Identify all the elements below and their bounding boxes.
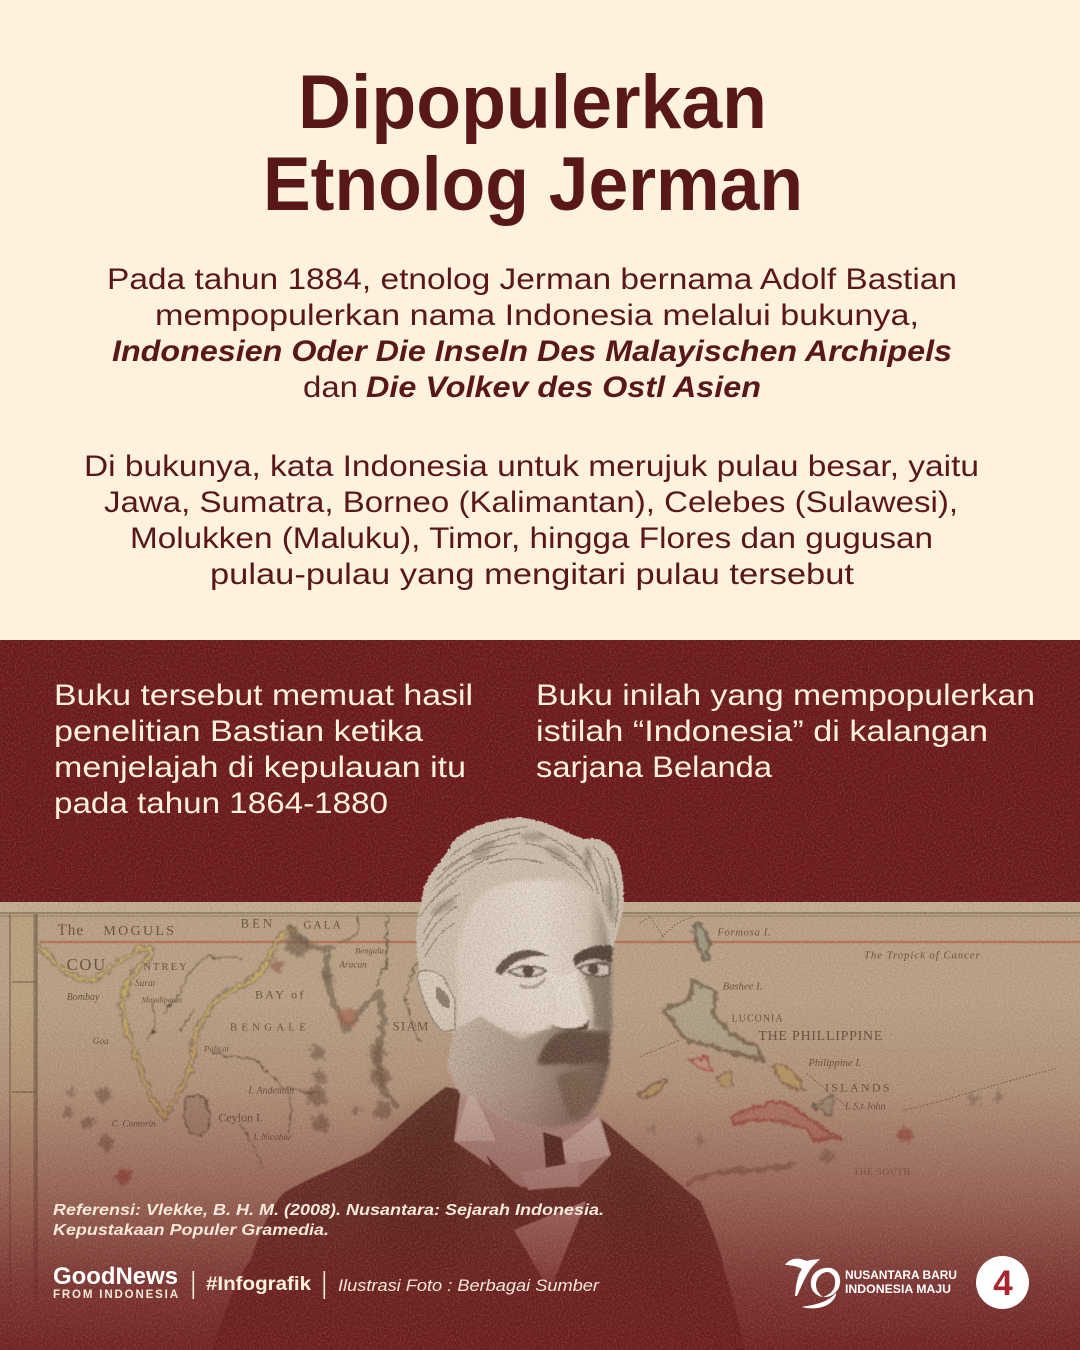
title (263, 60, 803, 227)
map west: India and Bengal: Aracan (338, 960, 367, 970)
beard stipple (447, 1017, 613, 1130)
panel text right: Dutch scholars: Buku inilah yang mempopulerkan (536, 679, 1035, 712)
brows (495, 950, 550, 975)
map east: Formosa and Philippines: THE SOUTH (853, 1168, 911, 1178)
logo text: Nusantara Baru Indonesia Maju: NUSANTARA BARU (845, 1268, 957, 1282)
map east: Formosa and Philippines: ISLANDS (825, 1080, 892, 1094)
face (455, 880, 612, 1033)
hair shading (429, 832, 617, 924)
reference note: Kepustakaan Populer Gramedia. (53, 1222, 329, 1239)
dark red lower panel (0, 640, 1080, 1350)
paper grain texture (0, 640, 1080, 1350)
map west: India and Bengal: Bengala (355, 945, 384, 955)
map east: Formosa and Philippines: The Tropick of Cancer (864, 950, 981, 961)
map east: Formosa and Philippines: THE PHILLIPPINE (758, 1029, 883, 1044)
map west: India and Bengal: MOGULS (103, 924, 176, 939)
nose (547, 970, 590, 1031)
paragraph: the word Indonesia: Jawa, Sumatra, Borneo (Kalimantan), Celebes (Sulawesi), (104, 486, 958, 519)
portrait shirt and collar (454, 1080, 611, 1291)
map east: Formosa and Philippines (640, 917, 1057, 1183)
map west: India and Bengal: The (57, 922, 84, 939)
map west: India and Bengal: Palicat (203, 1043, 230, 1053)
map west: India and Bengal: BENGALE (230, 1023, 310, 1034)
hair strands (420, 827, 618, 957)
map west: India and Bengal: C. Comorin (112, 1120, 156, 1130)
page number badge (976, 1256, 1029, 1309)
map west: India and Bengal: COU (67, 955, 107, 974)
cheek shadow (583, 957, 612, 1030)
portrait stipple (416, 817, 624, 1106)
map west: India and Bengal: Goa (93, 1037, 109, 1047)
reference note (53, 1202, 604, 1239)
paragraph: Bastian's books: dan (303, 371, 358, 404)
logo: GoodNews from Indonesia: FROM INDONESIA (53, 1289, 178, 1301)
cream top background (0, 0, 1080, 640)
footer tag: Infografik (192, 1271, 325, 1299)
map east: Formosa and Philippines: Formosa I. (716, 927, 771, 938)
map west: India and Bengal: Ceylon I. (218, 1110, 263, 1124)
panel text left: Bastian's research (54, 679, 473, 820)
illustration: portrait of Adolf Bastian (212, 813, 745, 1350)
panel text left: Bastian's research: penelitian Bastian ketika (54, 715, 423, 748)
panel: antique map (0, 902, 1080, 1350)
panel text left: Bastian's research: menjelajah di kepulauan itu (54, 751, 466, 784)
title: Dipopulerkan (298, 60, 767, 145)
map west: India and Bengal: Bombay (67, 992, 100, 1003)
map east: Formosa and Philippines: Philippine I. (807, 1058, 862, 1069)
paragraph: Bastian's books: mempopulerkan nama Indonesia melalui bukunya, (155, 299, 919, 332)
reference note: Referensi: Vlekke, B. H. M. (2008). Nusantara: Sejarah Indonesia. (53, 1202, 604, 1219)
map west: India and Bengal (40, 917, 430, 1185)
logo: GoodNews from Indonesia: GoodNews (53, 1263, 178, 1290)
page number badge: 4 (993, 1264, 1013, 1303)
portrait jacket (212, 1087, 745, 1350)
panel text left: Bastian's research: pada tahun 1864-1880 (54, 787, 388, 820)
map west: India and Bengal: SIAM (393, 1020, 430, 1034)
paragraph: the word Indonesia: pulau-pulau yang mengitari pulau tersebut (210, 558, 855, 591)
fade to red over lower image (0, 1000, 1080, 1350)
portrait head (413, 813, 627, 1133)
panel text right: Dutch scholars (536, 679, 1035, 784)
paragraph: the word Indonesia: Molukken (Maluku), Timor, hingga Flores dan gugusan (130, 522, 933, 555)
map west: India and Bengal: I. Nicobar (252, 1133, 292, 1143)
title: Etnolog Jerman (263, 142, 803, 227)
beard (448, 1017, 610, 1129)
paragraph: Bastian's books: Indonesien Oder Die Inseln Des Malayischen Archipels (112, 335, 952, 368)
map west: India and Bengal: BEN (241, 917, 275, 931)
ear (417, 970, 455, 1032)
map west: India and Bengal: Surat (135, 979, 156, 989)
logo: 70 years emblem (785, 1259, 840, 1308)
map west: India and Bengal: Masulipatan (141, 996, 182, 1005)
paragraph: Bastian's books (107, 263, 957, 404)
map west: India and Bengal: NTREY (143, 962, 189, 973)
paragraph: Bastian's books: Die Volkev des Ostl Asien (366, 371, 761, 404)
map east: Formosa and Philippines: LUCONIA (732, 1013, 784, 1024)
panel text right: Dutch scholars: istilah “Indonesia” di kalangan (536, 715, 988, 748)
panel text right: Dutch scholars: sarjana Belanda (536, 751, 772, 784)
footer credit: Ilustrasi Foto : Berbagai Sumber (338, 1276, 600, 1295)
map east: Formosa and Philippines: I. S.t John (844, 1101, 885, 1112)
map west: India and Bengal: I. Andeman (247, 1085, 294, 1096)
logo text: Nusantara Baru Indonesia Maju: INDONESIA MAJU (845, 1282, 951, 1296)
mustache (537, 1030, 609, 1067)
paragraph: the word Indonesia (84, 450, 979, 591)
paragraph: the word Indonesia: Di bukunya, kata Indonesia untuk merujuk pulau besar, yaitu (84, 450, 979, 483)
paragraph: Bastian's books: Pada tahun 1884, etnolog Jerman bernama Adolf Bastian (107, 263, 957, 296)
map west: India and Bengal: BAY of (255, 988, 306, 1002)
footer tag: Infografik: #Infografik (206, 1274, 311, 1295)
logo text: Nusantara Baru Indonesia Maju (845, 1268, 957, 1296)
panel text left: Bastian's research: Buku tersebut memuat hasil (54, 679, 473, 712)
eyes (508, 963, 609, 987)
map east: Formosa and Philippines: Bashee I. (723, 981, 762, 992)
map west: India and Bengal: GALA (303, 919, 343, 931)
